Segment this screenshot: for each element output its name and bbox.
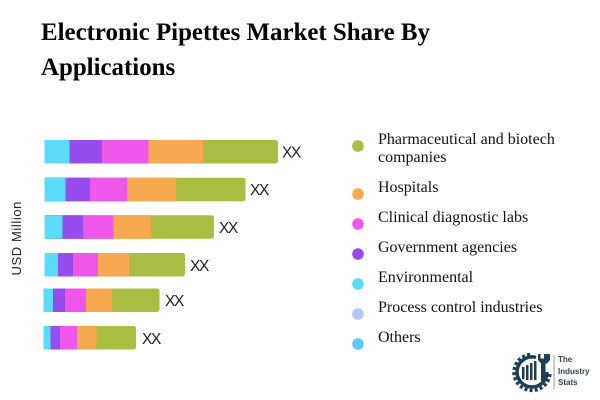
legend item: environmental bbox=[352, 269, 474, 290]
bar row 2: XX bbox=[250, 182, 270, 199]
legend item: hospitals bbox=[352, 179, 438, 200]
y axis label: USD Million bbox=[9, 201, 24, 276]
bar row 3: XX bbox=[219, 220, 239, 237]
bar row 3 bbox=[44, 215, 239, 239]
bar row 2 bbox=[44, 178, 270, 201]
bar row 6: XX bbox=[142, 331, 162, 348]
legend item: others bbox=[352, 329, 421, 350]
legend item: pharmaceutical bbox=[352, 131, 555, 166]
logo text: Stats bbox=[558, 378, 578, 387]
logo text bbox=[558, 355, 590, 387]
icon: gear with wrench and bars bbox=[514, 354, 555, 390]
legend item: pharmaceutical: companies bbox=[378, 149, 446, 166]
bar row 5: XX bbox=[165, 293, 185, 310]
title bbox=[41, 19, 431, 81]
legend item: government: Government agencies bbox=[378, 239, 517, 256]
legend item: others: Others bbox=[378, 329, 421, 346]
legend item: clinical bbox=[352, 209, 528, 230]
legend bbox=[352, 131, 555, 350]
logo text: The bbox=[558, 355, 573, 364]
bar row 1 bbox=[44, 140, 302, 164]
title: Applications bbox=[41, 54, 175, 81]
title: Electronic Pipettes Market Share By bbox=[41, 19, 431, 46]
legend item: hospitals: Hospitals bbox=[378, 179, 438, 196]
legend item: process control: Process control industries bbox=[378, 299, 542, 316]
logo text: Industry bbox=[558, 367, 590, 376]
legend item: pharmaceutical: Pharmaceutical and biotech bbox=[378, 131, 555, 148]
logo bbox=[514, 354, 590, 390]
bar row 5 bbox=[44, 288, 185, 312]
bar row 6 bbox=[44, 326, 162, 350]
bar row 1: XX bbox=[282, 144, 302, 162]
legend item: environmental: Environmental bbox=[378, 269, 474, 286]
legend item: clinical: Clinical diagnostic labs bbox=[378, 209, 528, 226]
bar row 4: XX bbox=[190, 258, 210, 275]
legend item: government bbox=[352, 239, 517, 260]
bar row 4 bbox=[44, 253, 210, 276]
stacked bar chart bbox=[44, 140, 302, 350]
